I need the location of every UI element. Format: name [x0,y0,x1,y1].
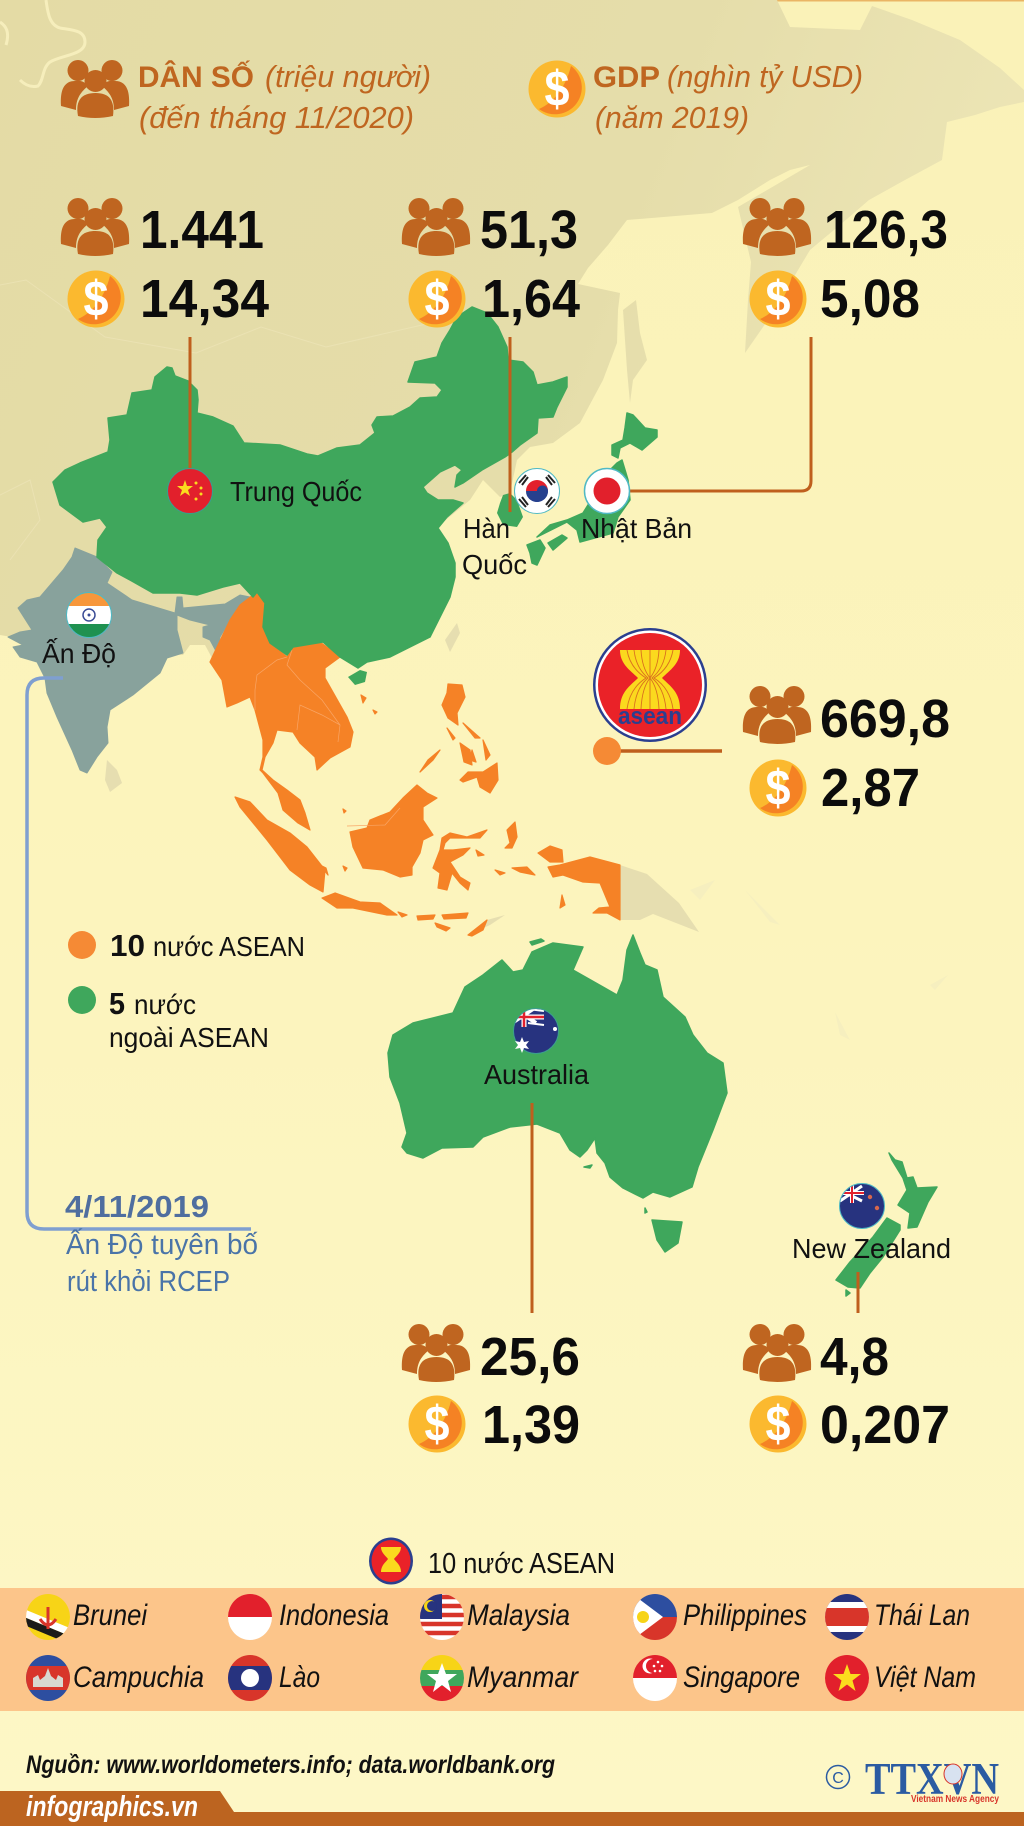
member: Laos: Lào [279,1661,320,1694]
heading: 10 ASEAN countries [369,1538,615,1584]
member: Thailand: Thái Lan [874,1599,970,1632]
label: Japan: Nhật Bản [581,513,692,544]
member: Vietnam: Việt Nam [874,1661,976,1694]
stats: Australia: 25,6 [480,1327,580,1387]
label: South Korea [462,513,527,580]
member: Cambodia [24,1654,204,1702]
stats: New Zealand: $ [766,1396,791,1452]
map legend: 5 [109,986,125,1021]
connector: India note [27,678,251,1229]
stats: ASEAN: $ [766,760,791,816]
member: Thailand [823,1593,970,1641]
header: population legend [61,59,431,135]
header: GDP legend: (năm 2019) [595,100,749,135]
member: Malaysia: Malaysia [467,1599,570,1632]
stats: China: $ [84,271,109,327]
connector: South Korea [508,337,512,512]
footer band: infographics.vn [26,1791,198,1823]
header: GDP legend: GDP [593,61,660,94]
map legend: ngoài ASEAN [109,1022,269,1053]
stats: New Zealand [743,1324,950,1455]
header: population legend: (triệu người) [265,59,431,94]
stats: Japan: $ [766,271,791,327]
header: GDP legend: $ [544,61,570,117]
connector: Australia [530,1103,534,1313]
connector: New Zealand [856,1272,860,1313]
stats: Japan [743,198,948,329]
heading: 10 ASEAN countries: 10 nước ASEAN [428,1548,615,1580]
stats: South Korea: 51,3 [480,200,578,260]
stats: Japan: 126,3 [824,200,948,260]
member: Indonesia: Indonesia [279,1599,389,1632]
TTXVN logo: C [832,1770,844,1787]
flag: China [166,467,214,515]
footer band [0,1791,1024,1826]
ASEAN marker and connector [593,737,722,765]
map: ASEAN countries [210,592,620,936]
stats: Australia: $ [424,1396,450,1452]
TTXVN logo: Vietnam News Agency [911,1794,999,1805]
stats: ASEAN: 669,8 [820,689,950,749]
note: India withdraws: Ấn Độ tuyên bố [66,1227,258,1261]
header: GDP legend: (nghìn tỷ USD) [667,59,863,94]
member: Laos [226,1654,320,1702]
flag: South Korea [514,468,560,514]
note: India withdraws: 4/11/2019 [65,1189,209,1224]
label: India: Ấn Độ [42,638,116,669]
label: China: Trung Quốc [230,476,362,507]
flag: Australia [512,1007,560,1055]
stats: Australia: 1,39 [482,1395,580,1455]
map legend: nước ASEAN [153,931,305,962]
member: Singapore [631,1654,800,1702]
map: India [8,548,250,773]
label: South Korea: Quốc [462,549,527,580]
member: Cambodia: Campuchia [73,1661,204,1694]
member: Myanmar: Myanmar [467,1661,579,1694]
stats: South Korea [402,198,580,329]
stats: Australia [402,1324,580,1455]
flag: India [65,591,113,639]
stats: ASEAN: 2,87 [821,758,920,818]
stats: China [61,198,269,329]
TTXVN logo: TTXVN [865,1754,999,1804]
note: India withdraws: rút khỏi RCEP [67,1266,230,1298]
background land mass [0,0,1024,1040]
map: Hainan [348,670,367,685]
flag: Japan [584,468,630,514]
label: New Zealand: New Zealand [792,1233,951,1264]
source line: Nguồn: www.worldometers.info; data.worldbank.org [26,1751,555,1779]
map: New Zealand [836,1153,937,1296]
header: population legend: (đến tháng 11/2020) [139,100,414,135]
member: Brunei: Brunei [73,1599,148,1632]
map legend [68,928,305,1053]
map: South Korea [497,493,523,527]
stats: Japan: 5,08 [820,269,920,329]
map legend: nước [134,989,196,1020]
stats: South Korea: $ [424,271,450,327]
header: GDP legend [528,59,863,135]
connector: China [188,337,192,472]
stats: New Zealand: 4,8 [820,1327,889,1387]
ASEAN logo [593,628,707,742]
stats: New Zealand: 0,207 [820,1395,950,1455]
label: South Korea: Hàn [463,513,510,544]
member: Brunei [26,1594,148,1640]
map: Australia [388,935,727,1252]
label: Australia: Australia [484,1059,589,1090]
panel: ASEAN member list [0,1588,1024,1711]
member: Singapore: Singapore [683,1661,800,1694]
stats: China: 1.441 [140,200,264,260]
flag: New Zealand [838,1182,886,1230]
member: Philippines: Philippines [683,1599,807,1632]
stats: South Korea: 1,64 [482,269,580,329]
TTXVN logo [826,1754,999,1805]
ASEAN logo: asean [618,703,682,730]
map: China [53,307,567,668]
stats: ASEAN [743,686,950,818]
member: Indonesia [226,1593,389,1641]
member: Malaysia [418,1593,570,1641]
note: India withdraws [65,1189,258,1298]
map: Japan [527,413,657,565]
member: Vietnam [825,1655,976,1701]
member: Philippines [631,1593,807,1641]
connector: Japan [628,337,811,491]
member: Myanmar [418,1654,579,1702]
header: population legend: DÂN SỐ [138,60,254,94]
stats: China: 14,34 [140,269,269,329]
map legend: 10 [110,928,145,963]
